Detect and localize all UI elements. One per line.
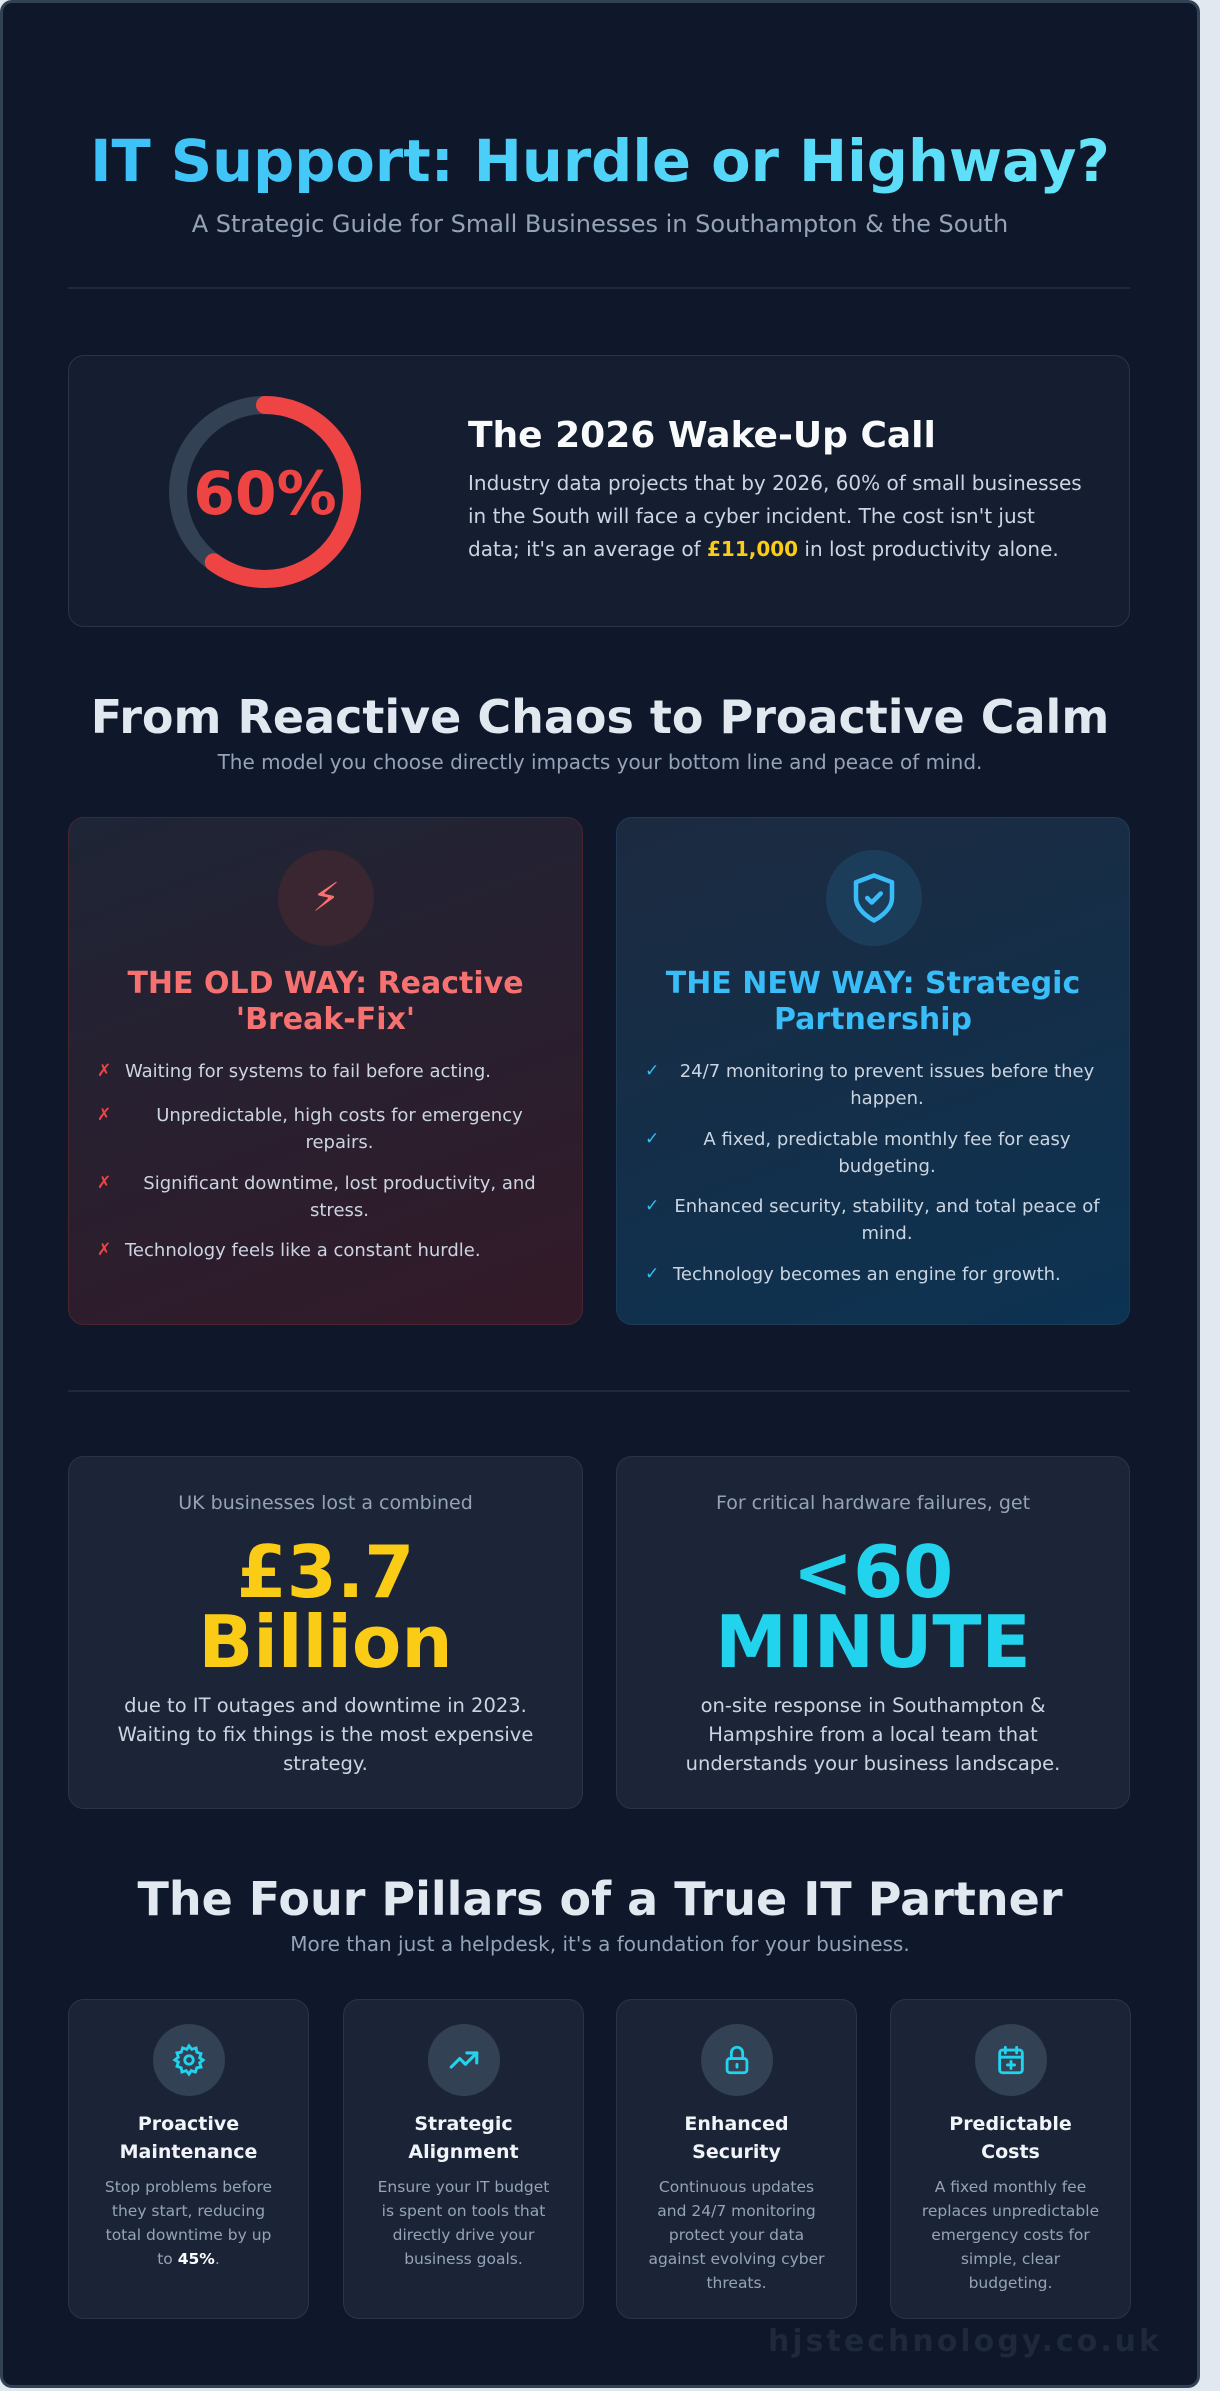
list	[97, 1061, 536, 1261]
pillar: predictable costs: A fixed monthly fee replaces unpredictable emergency costs for simple, clear budgeting.	[922, 2178, 1099, 2292]
panel: new way: 24/7 monitoring to prevent issues before they happen.	[680, 1061, 1094, 1109]
list	[645, 1061, 1100, 1285]
section heading: From Reactive Chaos to Proactive Calm	[91, 690, 1109, 744]
pillar: predictable costs	[890, 1999, 1131, 2319]
heading	[666, 966, 1080, 1037]
pillar: predictable costs: Predictable	[949, 2113, 1072, 2135]
pillars subtext: More than just a helpdesk, it's a foundation for your business.	[290, 1932, 910, 1956]
pillar: enhanced security: Continuous updates and 24/7 monitoring protect your data against evolving cyber threats.	[648, 2178, 825, 2292]
stat card: £3.7 Billion: Billion	[198, 1600, 453, 1684]
panel: new way: ✓	[645, 1129, 659, 1149]
footer watermark: hjstechnology.co.uk	[768, 2324, 1162, 2359]
pillars heading: The Four Pillars of a True IT Partner	[137, 1872, 1063, 1926]
icon: trend	[428, 2024, 500, 2096]
panel: new way: Enhanced security, stability, and total peace of mind.	[674, 1196, 1100, 1244]
stat card: £3.7 Billion: UK businesses lost a combined	[178, 1492, 473, 1514]
pillar: strategic alignment: Strategic	[414, 2113, 513, 2135]
icon: calendar	[975, 2024, 1047, 2096]
icon: shield	[826, 850, 922, 946]
panel: new way: Technology becomes an engine for growth.	[673, 1264, 1061, 1285]
subtitle: A Strategic Guide for Small Businesses in Southampton & the South	[192, 210, 1008, 238]
donut chart 60%: 60%	[193, 459, 337, 529]
heading: The 2026 Wake-Up Call	[468, 415, 936, 456]
panel: old way: ✗	[97, 1240, 111, 1260]
icon: broken: ⚡	[312, 875, 340, 921]
pillar: strategic alignment: Alignment	[408, 2141, 519, 2163]
panel: old way: Significant downtime, lost productivity, and stress.	[143, 1173, 536, 1221]
icon: broken	[278, 850, 374, 946]
heading: Partnership	[774, 1002, 972, 1037]
stat card: <60 minute: MINUTE	[715, 1600, 1031, 1684]
panel: new way: ✓	[645, 1196, 659, 1216]
body text: Industry data projects that by 2026, 60% of small businesses in the South will face a cyber incident. The cost isn't just data; it's an average of £11,000 in lost productivity alone.	[468, 471, 1082, 561]
heading: 'Break-Fix'	[236, 1002, 415, 1037]
panel: wake-up call	[68, 355, 1130, 627]
pillar: enhanced security: Enhanced	[684, 2113, 789, 2135]
stat card: <60 minute: on-site response in Southampton & Hampshire from a local team that understands your business landscape.	[686, 1694, 1060, 1775]
panel: new way	[616, 817, 1130, 1325]
panel: old way: Unpredictable, high costs for emergency repairs.	[156, 1105, 523, 1153]
donut chart 60%	[169, 396, 361, 588]
pillar: strategic alignment: Ensure your IT budget is spent on tools that directly drive your business goals.	[378, 2178, 549, 2268]
pillar: enhanced security	[616, 1999, 857, 2319]
panel: old way: ✗	[97, 1173, 111, 1193]
panel: old way: Technology feels like a constant hurdle.	[125, 1240, 481, 1261]
pillar: predictable costs: Costs	[981, 2141, 1040, 2163]
stat card: <60 minute: For critical hardware failures, get	[716, 1492, 1030, 1514]
panel: new way: ✓	[645, 1264, 659, 1284]
panel: new way: A fixed, predictable monthly fee for easy budgeting.	[703, 1129, 1071, 1177]
panel: old way: ✗	[97, 1105, 111, 1125]
title: IT Support: Hurdle or Highway?	[90, 128, 1110, 195]
section subtext: The model you choose directly impacts your bottom line and peace of mind.	[218, 750, 982, 774]
heading: THE NEW WAY: Strategic	[666, 966, 1080, 1001]
panel: old way: ✗	[97, 1061, 111, 1081]
pillar: proactive maintenance	[68, 1999, 309, 2319]
heading	[127, 966, 524, 1037]
stat card: £3.7 Billion: due to IT outages and downtime in 2023. Waiting to fix things is the most expensive strategy.	[118, 1694, 533, 1775]
pillar: proactive maintenance: Stop problems before they start, reducing total downtime by up to 45%.	[105, 2178, 272, 2268]
stat card: <60 minute	[616, 1456, 1130, 1809]
heading: THE OLD WAY: Reactive	[127, 966, 524, 1001]
pillar: proactive maintenance: Maintenance	[120, 2141, 257, 2163]
stat card: <60 minute: <60	[793, 1530, 953, 1614]
pillar: strategic alignment	[343, 1999, 584, 2319]
panel: new way: ✓	[645, 1061, 659, 1081]
pillar: proactive maintenance: Proactive	[138, 2113, 239, 2135]
stat card: £3.7 Billion	[68, 1456, 583, 1809]
stat card: £3.7 Billion: £3.7	[237, 1530, 414, 1614]
panel: old way	[68, 817, 583, 1325]
pillar: enhanced security: Security	[692, 2141, 781, 2163]
panel: old way: Waiting for systems to fail before acting.	[125, 1061, 491, 1082]
icon: gear	[153, 2024, 225, 2096]
icon: lock	[701, 2024, 773, 2096]
